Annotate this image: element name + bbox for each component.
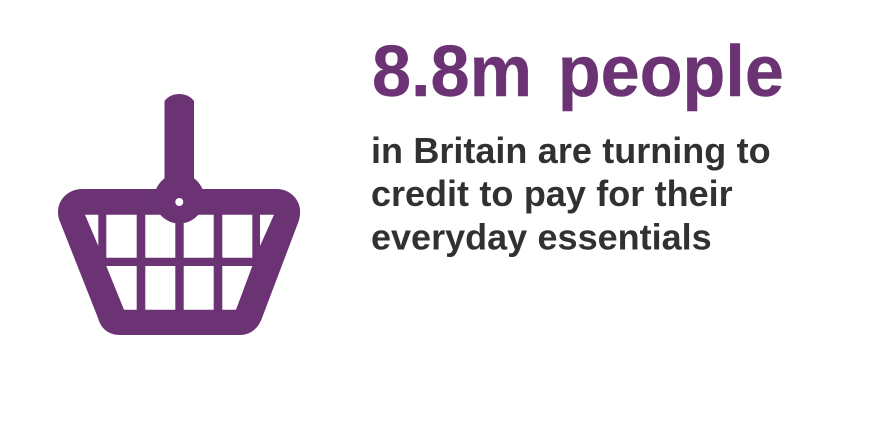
basket handle	[164, 94, 194, 195]
body text	[371, 130, 771, 257]
basket body	[58, 189, 300, 335]
handle hub	[154, 174, 204, 224]
line 3: everyday essentials	[371, 216, 712, 257]
icon: shopping basket	[58, 94, 300, 335]
line 1: in Britain are turning to	[371, 130, 771, 171]
hub centre hole	[175, 198, 183, 206]
line 2: credit to pay for their	[371, 173, 733, 214]
headline: 8.8m people	[372, 32, 784, 112]
